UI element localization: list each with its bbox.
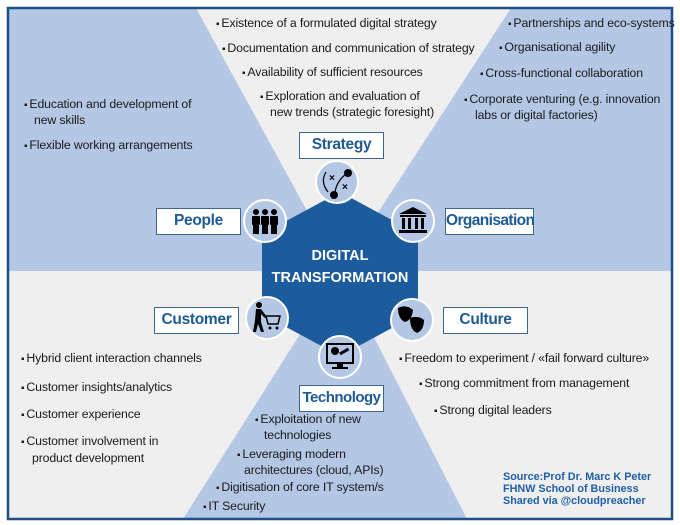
text: technologies (264, 428, 331, 442)
text: technology bullets (204, 412, 384, 513)
text: Documentation and communication of strategy (227, 41, 475, 55)
text: people bullets (24, 97, 193, 152)
hexagon (262, 192, 418, 356)
source note: FHNW School of Business (503, 483, 639, 495)
text: Exploitation of new (260, 412, 361, 426)
text: Strong commitment from management (424, 376, 629, 390)
icon: people (244, 200, 286, 242)
label: strategy (299, 132, 384, 159)
text: Customer insights/analytics (26, 380, 172, 394)
text: product development (32, 451, 144, 465)
text: Digitisation of core IT system/s (221, 480, 384, 494)
text: Education and development of (29, 97, 191, 111)
icon: organisation (392, 200, 434, 242)
text: architectures (cloud, APIs) (244, 463, 383, 477)
label: culture: Culture (459, 311, 512, 328)
text: Strong digital leaders (439, 403, 552, 417)
text: Corporate venturing (e.g. innovation (469, 92, 660, 106)
label: customer: Customer (162, 311, 231, 328)
source note (503, 471, 652, 507)
text: Existence of a formulated digital strategy (221, 16, 437, 30)
label: customer (154, 307, 239, 334)
text: Leveraging modern (242, 447, 346, 461)
label: organisation: Organisation (446, 212, 534, 229)
text: labs or digital factories) (475, 108, 598, 122)
text: Customer involvement in (26, 434, 158, 448)
label: strategy: Strategy (312, 136, 371, 153)
source note: Shared via @cloudpreacher (503, 495, 646, 507)
text: Organisational agility (504, 40, 615, 54)
icon: customer (246, 297, 288, 339)
label: organisation (445, 208, 534, 235)
hexagon title (272, 248, 408, 286)
text: new trends (strategic foresight) (270, 105, 434, 119)
label: people (156, 208, 241, 235)
text: new skills (34, 113, 85, 127)
text: Exploration and evaluation of (265, 89, 420, 103)
icon: strategy: × (329, 173, 335, 184)
label: technology: Technology (302, 389, 381, 406)
icon: culture (391, 299, 433, 341)
text: Hybrid client interaction channels (26, 351, 202, 365)
hexagon title: DIGITAL (312, 248, 369, 264)
text: IT Security (208, 499, 265, 513)
text: Freedom to experiment / «fail forward culture» (404, 351, 649, 365)
text: Cross-functional collaboration (485, 66, 643, 80)
text: Customer experience (26, 407, 140, 421)
icon: strategy (316, 161, 358, 203)
text: Availability of sufficient resources (247, 65, 423, 79)
text: culture bullets (400, 351, 649, 417)
hexagon title: TRANSFORMATION (272, 270, 408, 286)
text: customer bullets (22, 351, 202, 465)
text: Flexible working arrangements (29, 138, 193, 152)
icon: technology (319, 336, 361, 378)
source note: Source:Prof Dr. Marc K Peter (503, 471, 651, 483)
label: people: People (174, 212, 223, 229)
text: strategy bullets (216, 16, 475, 119)
label: technology (299, 385, 384, 412)
text: organisation bullets (464, 16, 675, 122)
text: Partnerships and eco-systems (513, 16, 675, 30)
icon: strategy: × (342, 182, 348, 193)
label: culture (443, 307, 528, 334)
